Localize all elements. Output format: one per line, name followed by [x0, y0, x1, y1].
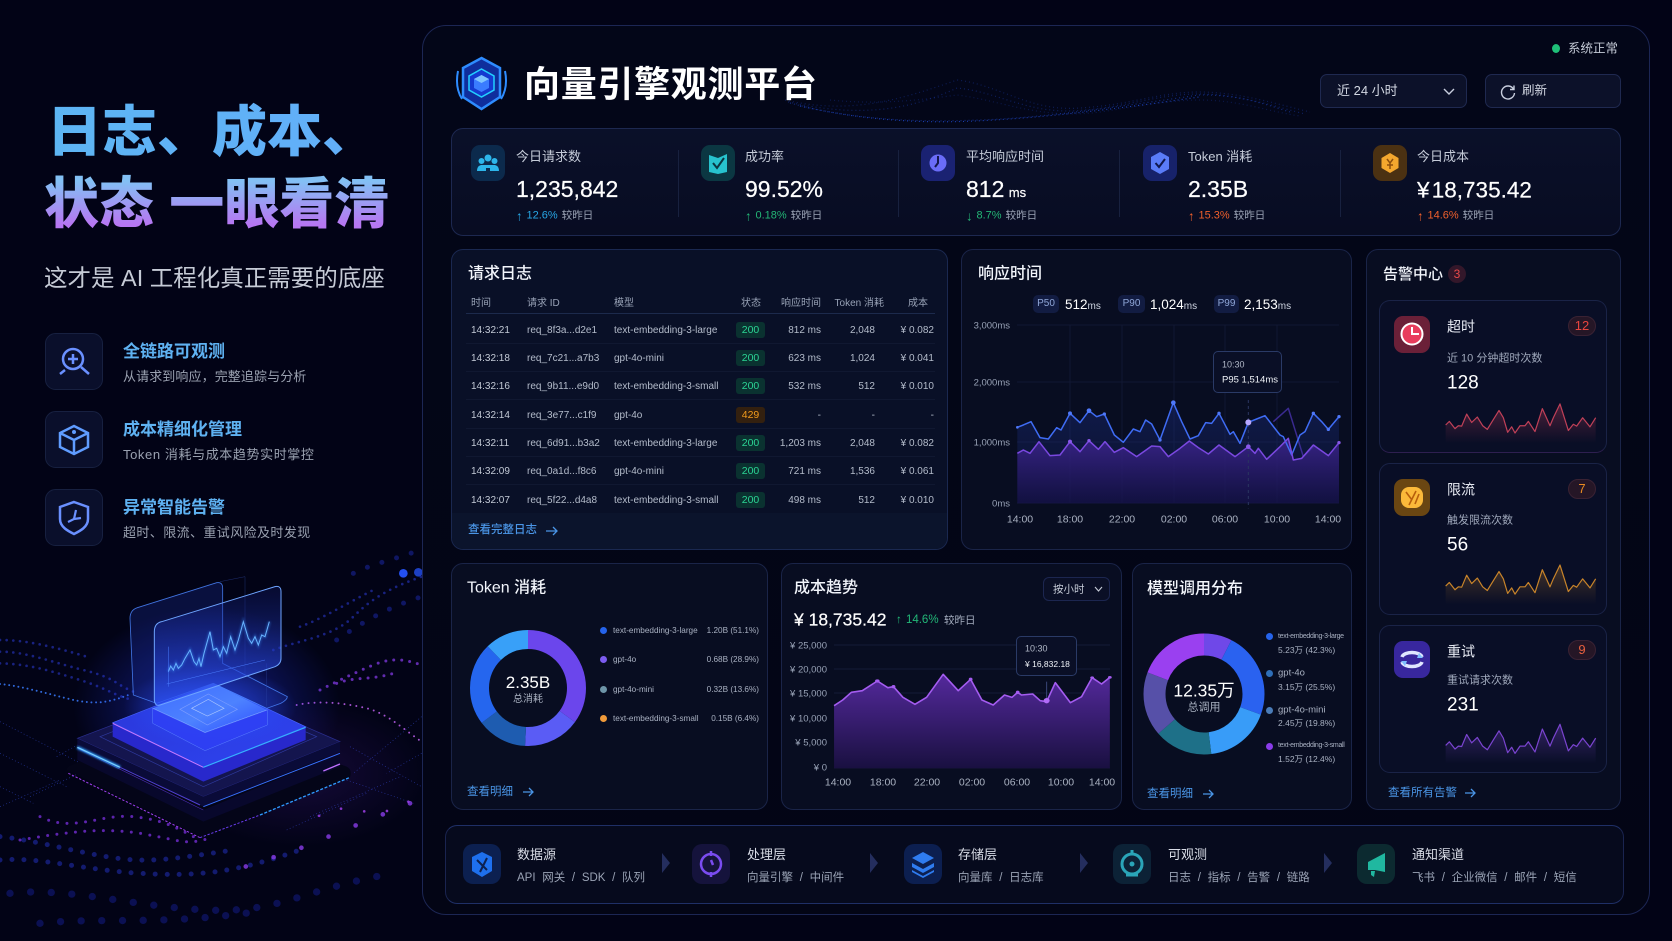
heading: 请求日志 [468, 265, 532, 282]
log row: gpt-4o-mini [614, 353, 664, 364]
icon: clock [921, 145, 955, 181]
heading: 模型调用分布 [1147, 580, 1243, 597]
log row: gpt-4o-mini [614, 466, 664, 477]
alert card: rate limit: 56 [1447, 535, 1468, 556]
donut center text: 12.35万 [1173, 680, 1235, 700]
tooltip: P95: P95 1,514ms [1222, 374, 1278, 385]
KPI: cost today [1373, 145, 1532, 223]
x axis labels: 14:00 [1089, 777, 1115, 789]
KPI: average response time: 812 ms [966, 176, 1026, 202]
log row: 812 ms [788, 325, 821, 336]
x axis labels: 06:00 [1004, 777, 1030, 789]
donut center text [1174, 678, 1234, 715]
KPI: success rate: 较昨日 [791, 210, 822, 222]
alert card: rate limit [1379, 463, 1607, 615]
cost headline: ↑ 14.6% [896, 614, 939, 626]
log row: rate limited: 14:32:14 [471, 410, 510, 421]
x axis labels: 06:00 [1212, 514, 1238, 526]
log row: 512 [858, 381, 875, 392]
donut chart: model share [1144, 634, 1264, 754]
main heading: 状态 一眼看清 [44, 173, 389, 235]
stage: storage [904, 844, 1094, 884]
left illustration: isometric chip platform over dot field [0, 550, 422, 927]
log row: 498 ms [788, 495, 821, 506]
log row: text-embedding-3-small [614, 381, 718, 392]
legend: text-embedding-3-large [1278, 633, 1344, 640]
log row: 721 ms [788, 466, 821, 477]
stage: observability: 日志 / 指标 / 告警 / 链路 [1168, 872, 1310, 884]
KPI: token usage: Token 消耗 [1188, 149, 1252, 164]
granularity dropdown: 按小时 [1053, 584, 1084, 596]
main heading: 日志、成本、 [47, 101, 377, 163]
feature: full trace observability: 全链路可观测 [123, 342, 225, 361]
cost headline: 较昨日 [944, 615, 976, 627]
stage: observability [1113, 844, 1303, 884]
feature: anomaly alerts [45, 489, 311, 546]
time range dropdown [1320, 74, 1467, 108]
stage: notification: 飞书 / 企业微信 / 邮件 / 短信 [1412, 872, 1577, 884]
KPI: cost today: 今日成本 [1417, 149, 1469, 164]
sparklines [1445, 403, 1596, 758]
log row: req_5f22...d4a8 [527, 495, 597, 506]
log row: rate limited: - [872, 410, 875, 421]
icon: people [471, 145, 505, 181]
legend: gpt-4o [1278, 667, 1305, 678]
system status: 系统正常 [1568, 42, 1618, 56]
percentile chips [1033, 295, 1291, 313]
KPI: requests today: 较昨日 [562, 210, 593, 222]
table header: 响应时间 [781, 298, 821, 309]
log row: 14:32:09 [471, 466, 510, 477]
icon: magnifier [45, 333, 103, 390]
log row: ¥ 0.041 [901, 353, 934, 364]
alert card: timeout: 近 10 分钟超时次数 [1447, 352, 1542, 364]
stage: notification [1357, 844, 1547, 884]
stage: observability: 可观测 [1168, 847, 1207, 862]
arrow [1324, 853, 1332, 873]
log row: rate limited: gpt-4o [614, 410, 642, 421]
y axis labels [790, 640, 827, 773]
donut center text: 总调用 [1188, 701, 1220, 713]
separator [898, 150, 899, 217]
log row: 2,048 [850, 438, 875, 449]
x axis labels: 22:00 [914, 777, 940, 789]
icon: check flag [701, 145, 735, 181]
cost headline: ¥ 18,735.42 [794, 610, 886, 630]
feature: cost management: 成本精细化管理 [123, 420, 242, 439]
KPI: average response time: 较昨日 [1006, 210, 1037, 222]
feature: full trace observability: 从请求到响应，完整追踪与分析 [123, 369, 306, 384]
KPI: token usage: 2.35B [1188, 176, 1248, 202]
log row: ¥ 0.061 [901, 466, 934, 477]
y axis labels: ¥ 15,000 [790, 688, 827, 699]
arrow [662, 853, 670, 873]
legend [1265, 630, 1347, 766]
y axis labels: ¥ 10,000 [790, 713, 827, 724]
panel: token usage [451, 563, 768, 810]
x axis labels: 14:00 [825, 777, 851, 789]
y axis labels [974, 320, 1010, 509]
alert card: timeout [1379, 300, 1607, 453]
alert card: retry: 9 [1578, 642, 1586, 657]
log row: ¥ 0.010 [901, 381, 934, 392]
separator [678, 150, 679, 217]
y axis labels: ¥ 20,000 [790, 664, 827, 675]
feature: anomaly alerts: 异常智能告警 [123, 498, 225, 517]
alert card: rate limit: 限流 [1447, 482, 1475, 498]
feature: cost management: Token 消耗与成本趋势实时掌控 [123, 447, 315, 462]
y axis labels: ¥ 0 [814, 762, 827, 773]
subtitle: 这才是 AI 工程化真正需要的底座 [44, 265, 385, 291]
y axis labels: 1,000ms [974, 437, 1010, 448]
stage: storage: 向量库 / 日志库 [958, 872, 1044, 884]
icon: hex check [1143, 145, 1177, 181]
stage: notification: 通知渠道 [1412, 847, 1464, 862]
icon: storage [904, 844, 942, 884]
percentile chips: P50 [1037, 298, 1055, 309]
KPI: token usage: 15.3% [1198, 209, 1230, 221]
KPI: average response time: ↓ [966, 208, 972, 223]
log row: 14:32:18 [471, 353, 510, 364]
log row: 200 [742, 324, 759, 336]
log row: text-embedding-3-large [614, 325, 717, 336]
icon: cube [45, 411, 103, 468]
alert card: retry: 重试 [1447, 644, 1475, 660]
main heading [44, 101, 389, 235]
heading: Token 消耗 [467, 579, 546, 596]
log row: 532 ms [788, 381, 821, 392]
tooltip: P95: 10:30 [1222, 360, 1245, 370]
log row: 14:32:21 [471, 325, 510, 336]
log row: rate limited: - [818, 410, 821, 421]
refresh button: 刷新 [1522, 84, 1547, 98]
log row: rate limited: req_3e77...c1f9 [527, 410, 596, 421]
KPI: requests today: 1,235,842 [516, 176, 618, 202]
log row: 2,048 [850, 325, 875, 336]
footer link: 查看完整日志 [468, 524, 537, 536]
log row: ¥ 0.010 [901, 495, 934, 506]
icon: data source [463, 844, 501, 884]
stage: data source [463, 844, 653, 884]
stage: storage: 存储层 [958, 847, 997, 862]
percentile chips: 512ms [1065, 297, 1101, 312]
icon: platform logo [456, 56, 507, 110]
tooltip: cost: 10:30 [1025, 644, 1048, 654]
legend: text-embedding-3-small [1278, 742, 1345, 749]
KPI: success rate [701, 145, 823, 223]
footer link [452, 513, 947, 549]
log row [466, 372, 935, 400]
x axis labels: 18:00 [1057, 514, 1083, 526]
KPI: requests today: 12.6% [526, 209, 558, 221]
feature: cost management [45, 411, 315, 468]
KPI: cost today: 较昨日 [1463, 210, 1494, 222]
legend: 0.68B (28.9%) [707, 655, 759, 664]
percentile chips: P90 [1123, 298, 1140, 309]
log row: 200 [742, 380, 759, 392]
table header: 成本 [908, 298, 928, 309]
link: details [1147, 785, 1215, 803]
KPI: requests today [471, 145, 618, 223]
KPI: token usage: 较昨日 [1234, 210, 1265, 222]
y axis labels: 3,000ms [974, 320, 1010, 331]
panel: request log [451, 249, 948, 550]
heading: 告警中心 [1383, 266, 1443, 283]
x axis labels: 14:00 [1315, 514, 1341, 526]
link: all alerts: 查看所有告警 [1388, 787, 1457, 799]
separator [1340, 150, 1341, 217]
KPI: average response time [921, 145, 1044, 223]
log row [466, 344, 935, 372]
log row: req_8f3a...d2e1 [527, 325, 597, 336]
donut center text: 总消耗 [513, 694, 543, 705]
cost headline [794, 610, 976, 630]
log row [471, 492, 934, 508]
dot bands [0, 550, 423, 923]
log row: req_0a1d...f8c6 [527, 466, 596, 477]
log row [466, 316, 935, 344]
heading: 响应时间 [978, 265, 1042, 282]
table header [466, 294, 935, 314]
feature: full trace observability [45, 333, 306, 390]
KPI: average response time: 平均响应时间 [966, 149, 1044, 164]
KPI: cost today: 14.6% [1428, 209, 1459, 221]
log row: text-embedding-3-small [614, 495, 718, 506]
log row: 200 [742, 494, 759, 506]
KPI: token usage: ↑ [1188, 208, 1194, 223]
legend: gpt-4o [613, 655, 636, 664]
stage: data source: 数据源 [517, 847, 556, 862]
x axis labels: 10:00 [1264, 514, 1290, 526]
table header: 状态 [741, 298, 761, 309]
KPI: cost today: ↑ [1417, 208, 1424, 223]
panel: response time [961, 249, 1352, 550]
log row: req_6d91...b3a2 [527, 438, 600, 449]
icon: clock [1394, 316, 1430, 353]
y axis labels: ¥ 25,000 [790, 640, 827, 651]
panel: cost trend [781, 563, 1122, 810]
icon: processing [692, 844, 730, 884]
legend: 1.52万 (12.4%) [1278, 754, 1335, 764]
panel: architecture pipeline strip [445, 825, 1624, 904]
icon: coin [1373, 145, 1407, 181]
log row [466, 429, 935, 457]
grid lines [0, 717, 422, 830]
link: details [467, 785, 534, 798]
KPI: cost today: ¥ 18,735.42 [1417, 178, 1532, 202]
link: details: 查看明细 [467, 786, 513, 798]
icon: limiter [1394, 479, 1430, 516]
icon: shield [45, 489, 103, 546]
y axis labels: 0ms [992, 498, 1010, 509]
alert card: retry: 重试请求次数 [1447, 674, 1513, 686]
legend [600, 626, 759, 723]
y axis labels: ¥ 5,000 [795, 737, 827, 748]
log row: 623 ms [788, 353, 821, 364]
tooltip: cost: ¥ 16,832.18 [1025, 659, 1070, 669]
legend: 1.20B (51.1%) [707, 626, 759, 635]
alert card: retry: 231 [1447, 695, 1479, 716]
log row: ¥ 0.082 [901, 438, 934, 449]
donut center text: 2.35B [506, 673, 550, 692]
alert count badge: 3 [1454, 267, 1460, 281]
log row: req_7c21...a7b3 [527, 353, 599, 364]
stage: processing [692, 844, 882, 884]
granularity dropdown [1043, 577, 1110, 601]
arrow [870, 853, 878, 873]
panel: alert center [1366, 249, 1621, 810]
x axis labels: 22:00 [1109, 514, 1135, 526]
log row: 14:32:11 [471, 438, 509, 449]
log row: req_9b11...e9d0 [527, 381, 599, 392]
stage: processing: 处理层 [747, 847, 786, 862]
alert card: rate limit: 7 [1578, 481, 1586, 496]
arrow [1080, 853, 1088, 873]
legend: 0.32B (13.6%) [707, 685, 759, 694]
legend: 5.23万 (42.3%) [1278, 645, 1335, 655]
x axis labels: 18:00 [870, 777, 896, 789]
alert count badge [1448, 265, 1466, 283]
log row: 1,024 [850, 353, 875, 364]
log row: 14:32:16 [471, 381, 510, 392]
heading: 成本趋势 [794, 579, 858, 596]
legend: 2.45万 (19.8%) [1278, 718, 1335, 728]
percentile chips: 2,153ms [1244, 297, 1291, 312]
alert card: retry [1379, 625, 1607, 773]
donut center text [506, 673, 550, 705]
stage: data source: API 网关 / SDK / 队列 [517, 872, 645, 884]
legend: gpt-4o-mini [1278, 704, 1326, 715]
line chart: response percentiles [1016, 324, 1341, 508]
icon: observability [1113, 844, 1151, 884]
legend: text-embedding-3-large [613, 626, 698, 635]
log row: 200 [742, 437, 759, 449]
feature: anomaly alerts: 超时、限流、重试风险及时发现 [123, 525, 311, 540]
y axis labels: 2,000ms [974, 377, 1010, 388]
separator [1119, 150, 1120, 217]
area chart: cost [834, 644, 1112, 768]
log row: 200 [742, 352, 759, 364]
log row: 200 [742, 465, 759, 477]
log row: 1,203 ms [780, 438, 821, 449]
panel: KPI strip [451, 128, 1621, 236]
title: 向量引擎观测平台 [524, 63, 818, 104]
panel: main dashboard frame [422, 25, 1650, 915]
log row [466, 457, 935, 485]
KPI: success rate: ↑ [745, 208, 752, 223]
log row: 1,536 [850, 466, 875, 477]
time range dropdown: 近 24 小时 [1337, 83, 1398, 98]
x axis labels: 02:00 [959, 777, 985, 789]
x axis labels [1007, 514, 1341, 526]
percentile chips: P99 [1218, 298, 1235, 309]
KPI: requests today: 今日请求数 [516, 149, 581, 164]
table header: 请求 ID [527, 298, 560, 309]
KPI: requests today: ↑ [516, 208, 522, 223]
table header: 模型 [614, 298, 634, 309]
legend: 0.15B (6.4%) [711, 714, 759, 723]
x axis labels [825, 777, 1115, 789]
link: details: 查看明细 [1147, 788, 1193, 800]
percentile chips: 1,024ms [1150, 297, 1197, 312]
alert card: timeout: 超时 [1447, 319, 1475, 335]
alert card: timeout: 12 [1575, 318, 1589, 333]
x axis labels: 14:00 [1007, 514, 1033, 526]
alert card: timeout: 128 [1447, 373, 1479, 394]
legend: text-embedding-3-small [613, 714, 699, 723]
log row: ¥ 0.082 [901, 325, 934, 336]
legend: 3.15万 (25.5%) [1278, 682, 1335, 692]
icon: retry loop [1394, 641, 1430, 678]
tooltip: P95 [1213, 351, 1282, 393]
x axis labels: 02:00 [1161, 514, 1187, 526]
table header: 时间 [471, 298, 491, 309]
log row: rate limited [466, 401, 935, 429]
refresh button [1485, 74, 1621, 108]
log row: text-embedding-3-large [614, 438, 717, 449]
stage: processing: 向量引擎 / 中间件 [747, 872, 844, 884]
decorative dotted wave [785, 79, 1310, 122]
KPI: success rate: 成功率 [745, 149, 784, 164]
donut chart: token share [470, 630, 586, 746]
KPI: token usage [1143, 145, 1265, 223]
table header: Token 消耗 [835, 298, 884, 309]
log row: rate limited: - [931, 410, 934, 421]
KPI: success rate: 99.52% [745, 176, 823, 202]
tooltip: cost [1016, 636, 1077, 676]
panel: model distribution [1132, 563, 1352, 810]
legend: gpt-4o-mini [613, 685, 654, 694]
KPI: success rate: 0.18% [756, 209, 787, 221]
log row: 14:32:07 [471, 495, 510, 506]
alert card: rate limit: 触发限流次数 [1447, 514, 1513, 526]
x axis labels: 10:00 [1048, 777, 1074, 789]
icon: megaphone [1357, 844, 1395, 884]
log row: rate limited: 429 [742, 409, 759, 421]
log row: 512 [858, 495, 875, 506]
KPI: average response time: 8.7% [976, 209, 1002, 221]
